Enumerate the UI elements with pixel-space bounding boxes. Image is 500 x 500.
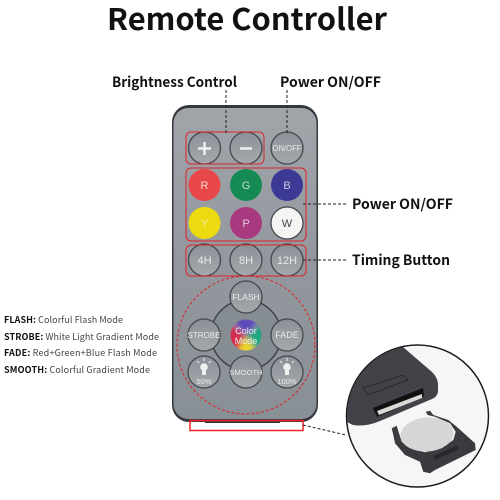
colour mode button: Color — [235, 326, 257, 336]
colour buttons: Y — [201, 218, 209, 230]
battery tray — [392, 411, 476, 473]
red highlight boxes — [186, 132, 306, 276]
colour buttons: P — [242, 218, 250, 230]
mode buttons: 50% — [196, 377, 212, 386]
icon: bulb 100% — [280, 358, 294, 375]
label: power on/off top: Power ON/OFF — [280, 72, 381, 92]
mode buttons: SMOOTH — [230, 368, 262, 377]
colour mode ring — [211, 300, 281, 370]
legend: mode descriptions: FADE: Red+Green+Blue Flash Mode — [4, 346, 157, 359]
timing buttons — [188, 244, 303, 276]
remote body — [172, 105, 318, 423]
label: power on/off side: Power ON/OFF — [352, 194, 453, 214]
mode buttons: FADE — [275, 330, 299, 340]
colour mode button: Mode — [235, 336, 257, 346]
button group: brightness and power: ON/OFF — [272, 144, 302, 153]
mode buttons: STROBE — [188, 331, 220, 340]
colour buttons: R — [201, 180, 209, 192]
colour mode button — [230, 320, 262, 350]
mode buttons: 100% — [277, 377, 297, 386]
timing buttons: 12H — [277, 255, 297, 267]
colour buttons — [188, 169, 303, 239]
dashed red circle — [177, 276, 315, 414]
mode buttons: FLASH — [232, 292, 260, 302]
leader lines — [226, 90, 348, 435]
battery slot highlight — [190, 420, 303, 430]
legend: mode descriptions — [4, 313, 159, 376]
legend: mode descriptions: FLASH: Colorful Flash Mode — [4, 313, 123, 326]
label: brightness control: Brightness Control — [112, 72, 238, 92]
button group: brightness and power — [188, 132, 303, 164]
colour buttons: B — [283, 180, 291, 192]
legend: mode descriptions: SMOOTH: Colorful Gradient Mode — [4, 363, 150, 376]
label: timing button: Timing Button — [352, 250, 450, 270]
timing buttons: 4H — [197, 255, 212, 267]
icon: bulb 50% — [197, 358, 211, 375]
inset: battery compartment — [340, 340, 488, 487]
mode buttons — [188, 281, 303, 388]
timing buttons: 8H — [239, 255, 253, 267]
colour buttons: G — [242, 180, 250, 192]
remote end — [347, 347, 438, 426]
colour buttons: W — [282, 218, 293, 230]
legend: mode descriptions: STROBE: White Light Gradient Mode — [4, 330, 159, 343]
